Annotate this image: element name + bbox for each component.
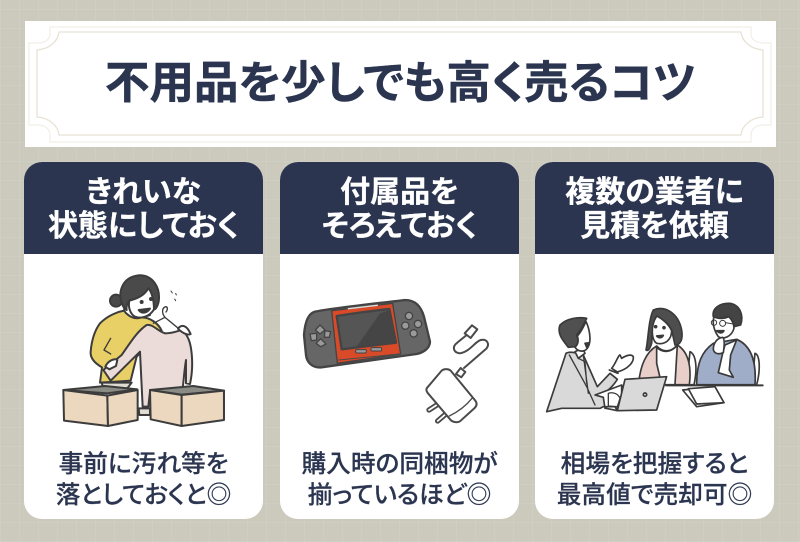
- icon: game console: [304, 300, 430, 367]
- panel heading: clean items: [24, 162, 263, 254]
- panel: accessories: [280, 162, 519, 519]
- panel heading: multiple dealers: [535, 162, 774, 254]
- panel heading: multiple dealers: 複数の業者に: [565, 176, 744, 209]
- panel caption: accessories: [301, 450, 498, 509]
- panel heading: clean items: 状態にしておく: [48, 210, 239, 243]
- panel: clean items: [24, 162, 263, 519]
- panel caption: accessories: 揃っているほど◎: [308, 482, 491, 509]
- icon: charger with cable: [426, 325, 488, 422]
- panel heading: accessories: [280, 162, 519, 254]
- panel caption: clean items: 落としておくと◎: [56, 482, 231, 509]
- panel caption: multiple dealers: [557, 451, 752, 509]
- panel caption: clean items: 事前に汚れ等を: [58, 451, 229, 478]
- title text: 不用品を少しでも高く売るコツ: [105, 59, 696, 108]
- icon: woman checking sweater with boxes: [63, 275, 224, 426]
- panel caption: clean items: [56, 450, 231, 509]
- title banner: [25, 21, 776, 147]
- panel heading: accessories: 付属品を: [340, 176, 459, 209]
- panel heading: accessories: そろえておく: [322, 210, 477, 243]
- panel caption: multiple dealers: 相場を把握すると: [561, 451, 748, 478]
- panel heading: clean items: きれいな: [86, 176, 201, 209]
- panel: multiple dealers: [535, 162, 774, 519]
- panel heading: multiple dealers: 見積を依頼: [580, 210, 729, 243]
- panel caption: multiple dealers: 最高値で売却可◎: [557, 482, 752, 509]
- panel caption: accessories: 購入時の同梱物が: [301, 451, 498, 478]
- icon: three people meeting at a table: [547, 303, 763, 412]
- icon: handheld game console and charger: [304, 300, 488, 422]
